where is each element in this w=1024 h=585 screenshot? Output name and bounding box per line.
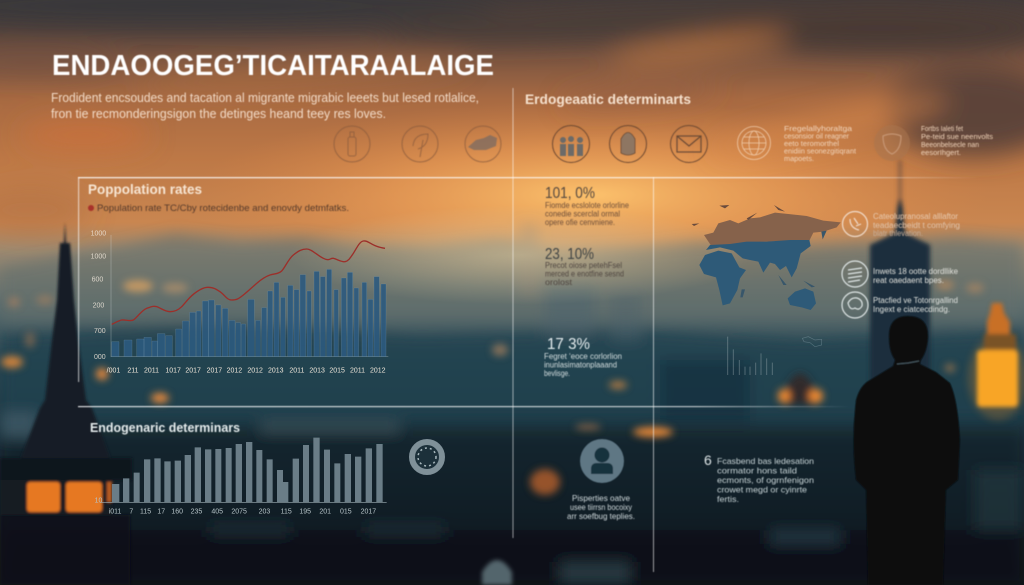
callout: numbered note: cormator hons taild bbox=[717, 466, 797, 476]
bar chart: 2017 bbox=[361, 508, 376, 515]
bar chart: 195 bbox=[299, 508, 311, 515]
stat: first: opere ofie cenvniene. bbox=[545, 218, 615, 227]
bar and line chart: 000 bbox=[94, 354, 106, 361]
icon: user bbox=[580, 439, 624, 483]
text: determinants notes: cesonsior oil reagner bbox=[784, 132, 849, 140]
map: Asia bbox=[706, 240, 811, 277]
icon: brain bbox=[842, 292, 868, 318]
text: user caption: arr soefbug teplies. bbox=[567, 511, 635, 521]
stat: first: Fiomde ecslolote orlorline bbox=[545, 201, 630, 210]
bar and line chart: 2012 bbox=[370, 367, 386, 374]
bar chart: 2075 bbox=[231, 508, 247, 515]
icon: hand bbox=[610, 126, 646, 162]
bar chart: i011 bbox=[109, 508, 121, 515]
callout: numbered note: crowet megd or cyinrte bbox=[717, 484, 807, 494]
bar chart: 17 bbox=[157, 508, 165, 515]
text: determinants notes: enidiin seonezgitiqrant bbox=[784, 146, 857, 156]
bar chart: 201 bbox=[319, 508, 331, 515]
landmark: glowing lantern bbox=[968, 303, 1024, 420]
map side notes bbox=[842, 212, 960, 318]
text: user caption: Pisperties oatve bbox=[572, 493, 630, 503]
bar and line chart bbox=[91, 231, 388, 374]
map side notes: reat oaedaent bpes. bbox=[873, 276, 944, 285]
bar and line chart: 2013 bbox=[268, 367, 284, 374]
mini bars bbox=[728, 337, 772, 375]
text: user caption: usee tiirrsn bocoixy bbox=[570, 502, 633, 512]
text: determinants notes bbox=[784, 124, 993, 163]
landmark: left tower and pagoda bbox=[0, 222, 132, 585]
bar chart: 015 bbox=[340, 508, 352, 515]
faded icon row bbox=[334, 126, 501, 162]
bar and line chart: 2011 bbox=[144, 367, 159, 374]
map side notes: blatr thlevation. bbox=[873, 229, 923, 238]
bar and line chart: 211 bbox=[127, 367, 139, 374]
icon: leaf bbox=[402, 126, 438, 162]
stat: first: 101, 0% bbox=[545, 185, 595, 202]
text: note two: Inwets 18 ootte dordllike bbox=[873, 267, 959, 276]
panel: endogenic determinants bbox=[90, 420, 442, 515]
map: Africa bbox=[699, 251, 746, 305]
bar and line chart: 2013 bbox=[309, 367, 325, 374]
panel: population rates bbox=[88, 181, 388, 374]
bar and line chart: 200 bbox=[93, 302, 104, 309]
icon: envelope bbox=[670, 126, 708, 162]
bar and line chart: 1000 bbox=[91, 231, 106, 238]
text: determinants notes: Fortbs Ialeti fet bbox=[921, 124, 964, 133]
stat: third: Fegret ‘eoce corlorlion bbox=[544, 352, 622, 361]
icon row: determinants bbox=[552, 125, 910, 162]
heading: population rates: Poppolation rates bbox=[88, 181, 202, 197]
bar and line chart: 700 bbox=[94, 328, 106, 335]
bar and line chart: /001 bbox=[107, 367, 120, 374]
world map bbox=[692, 205, 841, 375]
legend: Population rate TC/Cby rotecidenbe and enovdy detmfatks. bbox=[97, 203, 349, 214]
bar and line chart: 2012 bbox=[227, 367, 242, 374]
map: Australia bbox=[788, 288, 816, 310]
text: determinants notes: Beeonbelsecle nan bbox=[921, 140, 979, 149]
text: determinants notes: mapoets. bbox=[784, 154, 814, 163]
text: note one: Cateolupranosal alllaftor bbox=[873, 212, 958, 221]
stat: second: merced e enotfine sesnd bbox=[545, 270, 624, 278]
bar chart: 7 bbox=[129, 508, 133, 515]
panel: key statistics bbox=[544, 185, 630, 378]
icon: gauge ring bbox=[412, 442, 442, 472]
bar and line chart: 2011 bbox=[350, 367, 365, 374]
bar and line chart: 2012 bbox=[247, 367, 263, 374]
intro text: fron tie recmonderingsigon the detinges heand teey res loves. bbox=[51, 106, 386, 121]
text: determinants notes: Fregelallyhoraltga bbox=[784, 124, 853, 133]
callout: numbered note: ecmonts, of ogrnfenigon bbox=[717, 475, 814, 485]
bar chart: 203 bbox=[259, 508, 270, 515]
map: northern Eurasia bbox=[704, 213, 841, 245]
bar and line chart: 600 bbox=[92, 277, 103, 284]
stat: second: Precot oiose petehFsel bbox=[545, 261, 622, 270]
icon: people bbox=[552, 126, 590, 162]
bar chart: 115 bbox=[281, 508, 292, 515]
icon: bottle bbox=[334, 126, 370, 162]
bar chart: 405 bbox=[211, 508, 223, 515]
text: note three: Ptacfied ve Totonrgallind bbox=[873, 296, 958, 305]
heading: lower chart: Endogenaric determinars bbox=[90, 420, 240, 435]
bar chart: 160 bbox=[171, 508, 183, 515]
heading: determinants: Erdogeaatic determinarts bbox=[525, 91, 691, 107]
callout: numbered note bbox=[704, 452, 814, 504]
stat: third: bevlisge. bbox=[544, 369, 570, 378]
stat: second bbox=[545, 246, 624, 287]
icon: document bbox=[842, 261, 868, 287]
stat: third: inunlasimatonplaaand bbox=[544, 360, 617, 370]
stat: first bbox=[545, 185, 630, 227]
map side notes: teadaecbeidt t comfying bbox=[873, 221, 960, 230]
intro text bbox=[51, 90, 479, 121]
text: determinants notes: Pe-teid sue neenvolts bbox=[921, 132, 993, 141]
icon: cloud map bbox=[465, 126, 501, 162]
stat: first: conedie scerclal ormal bbox=[545, 210, 620, 218]
stat: second: 23, 10% bbox=[545, 246, 594, 263]
icon: phone bbox=[842, 212, 868, 236]
stat: second: orolost bbox=[545, 278, 573, 287]
bar and line chart: 1017 bbox=[165, 367, 181, 374]
text: determinants notes: eeto teromorthel bbox=[784, 139, 839, 148]
bar and line chart: 2017 bbox=[207, 367, 222, 374]
frame lines bbox=[78, 88, 980, 572]
map: islands bbox=[740, 231, 827, 297]
icon: shield bbox=[874, 125, 910, 161]
text: determinants notes: eesorIhgert. bbox=[921, 148, 961, 157]
stat: third bbox=[544, 336, 622, 378]
bar and line chart: 2015 bbox=[329, 367, 345, 374]
landmark: right tower bbox=[870, 160, 930, 400]
bar chart: 10 bbox=[95, 498, 103, 505]
bar and line chart: 1000 bbox=[91, 253, 106, 260]
bar and line chart: 2017 bbox=[185, 367, 201, 374]
bar and line chart: 2011 bbox=[289, 367, 304, 374]
figure: man silhouette bbox=[854, 316, 960, 585]
bar chart: 235 bbox=[191, 508, 202, 515]
map side notes: Ingext e ciatcecdindg. bbox=[873, 305, 950, 314]
icon: globe bbox=[738, 126, 770, 160]
callout: numbered note: Fcasbend bas ledesation bbox=[717, 456, 814, 466]
title: ENDAOOGEG’TICAITARAALAIGE bbox=[52, 50, 494, 82]
callout: numbered note: fertis. bbox=[717, 494, 739, 504]
bar chart bbox=[95, 438, 387, 515]
text: user caption bbox=[567, 493, 635, 521]
stat: third: 17 3% bbox=[547, 336, 590, 353]
bar chart: 115 bbox=[140, 508, 151, 515]
intro text: Frodident encsoudes and tacation al migrante migrabic leeets but lesed rotlalice, bbox=[51, 90, 479, 105]
callout: numbered note: 6 bbox=[704, 452, 712, 468]
